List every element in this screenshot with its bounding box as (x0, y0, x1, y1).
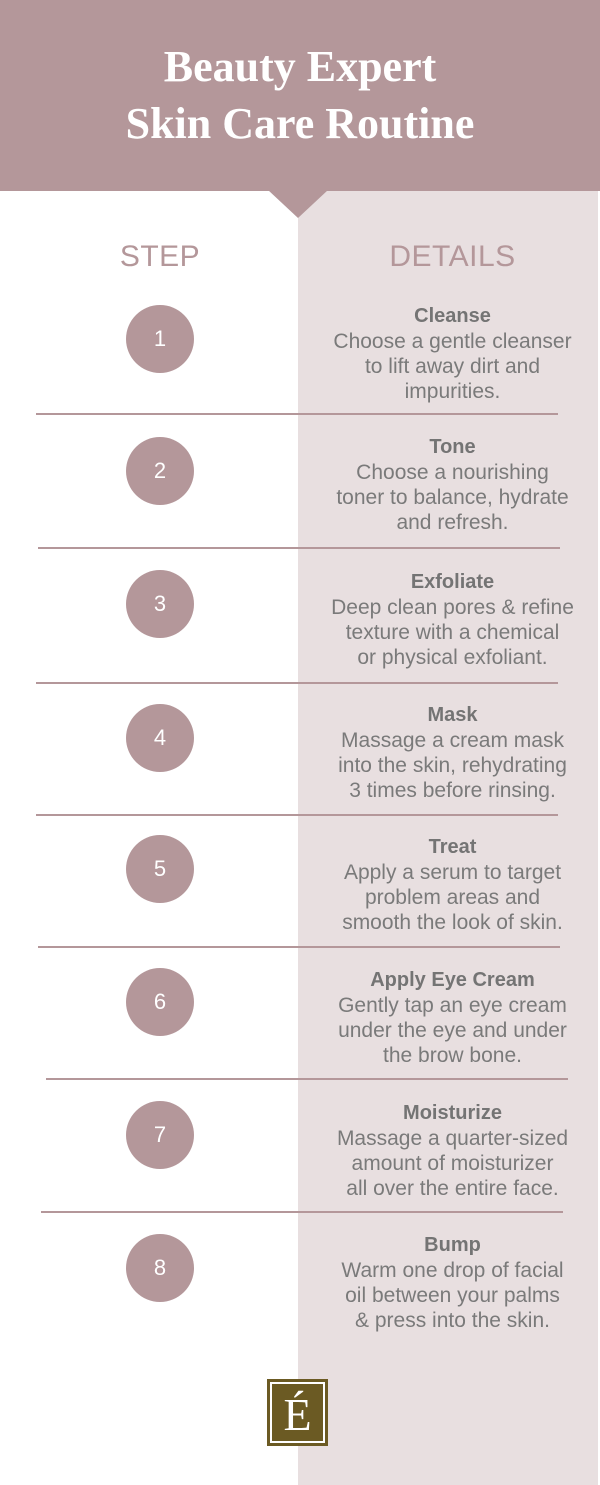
step 1 details: to lift away dirt and (365, 355, 540, 378)
step 6 details: under the eye and under (338, 1019, 567, 1042)
step 5 details (342, 836, 563, 934)
step 5 circle: 5 (154, 856, 166, 881)
step 8 details: & press into the skin. (355, 1309, 550, 1332)
step 5 details: Apply a serum to target (344, 861, 561, 884)
title (126, 42, 474, 148)
step 6 details: Gently tap an eye cream (338, 994, 567, 1017)
step 2 circle (126, 437, 194, 505)
logo: É (283, 1389, 312, 1440)
step 3 circle: 3 (154, 591, 166, 616)
step 2 details: Choose a nourishing (356, 461, 549, 484)
step 1 details (333, 305, 572, 403)
header pointer arrow (269, 191, 327, 218)
step 8 circle (126, 1234, 194, 1302)
step 6 details: the brow bone. (383, 1044, 522, 1067)
step 8 details: oil between your palms (345, 1284, 560, 1307)
step 5 details: smooth the look of skin. (342, 911, 563, 934)
step 7 details (337, 1102, 568, 1200)
step 4 details: Massage a cream mask (341, 729, 564, 752)
step 5 details: Treat (429, 836, 476, 858)
step 7 details: Massage a quarter-sized (337, 1127, 568, 1150)
step 1 details: Choose a gentle cleanser (333, 330, 572, 353)
step 1 details: Cleanse (414, 305, 491, 327)
step 4 details: Mask (427, 704, 478, 726)
step 3 details: texture with a chemical (346, 621, 559, 644)
step 2 details: toner to balance, hydrate (336, 486, 569, 509)
logo (267, 1379, 328, 1446)
step 7 circle (126, 1101, 194, 1169)
header banner (0, 0, 600, 191)
step 6 details (338, 969, 567, 1067)
step 1 circle (126, 305, 194, 373)
step 4 circle: 4 (154, 725, 166, 750)
heading: step: STEP (120, 240, 200, 273)
step 8 details: Warm one drop of facial (341, 1259, 564, 1282)
step 7 details: Moisturize (403, 1102, 502, 1124)
step 2 details: Tone (429, 436, 476, 458)
heading: details: DETAILS (389, 240, 516, 273)
step 4 circle (126, 704, 194, 772)
step 3 details: or physical exfoliant. (357, 646, 548, 669)
step 2 details (336, 436, 569, 534)
step 6 circle: 6 (154, 989, 166, 1014)
step 4 details: into the skin, rehydrating (338, 754, 567, 777)
step 7 details: all over the entire face. (346, 1177, 559, 1200)
step 7 details: amount of moisturizer (352, 1152, 553, 1175)
step 3 details: Exfoliate (411, 571, 494, 593)
step 8 circle: 8 (154, 1255, 166, 1280)
step 8 details: Bump (424, 1234, 481, 1256)
step 4 details: 3 times before rinsing. (349, 779, 556, 802)
step 3 details (331, 571, 574, 669)
step 1 details: impurities. (405, 380, 500, 403)
step 7 circle: 7 (154, 1122, 166, 1147)
step 6 circle (126, 968, 194, 1036)
step 8 details (341, 1234, 564, 1332)
step 6 details: Apply Eye Cream (370, 969, 535, 991)
step 5 details: problem areas and (365, 886, 540, 909)
step 3 circle (126, 570, 194, 638)
step 2 details: and refresh. (396, 511, 509, 534)
title: Skin Care Routine (126, 99, 474, 148)
step 5 circle (126, 835, 194, 903)
details column background (298, 190, 598, 1485)
step 3 details: Deep clean pores & refine (331, 596, 574, 619)
step 4 details (338, 704, 567, 802)
step 1 circle: 1 (154, 326, 166, 351)
step 2 circle: 2 (154, 458, 166, 483)
title: Beauty Expert (164, 42, 436, 91)
